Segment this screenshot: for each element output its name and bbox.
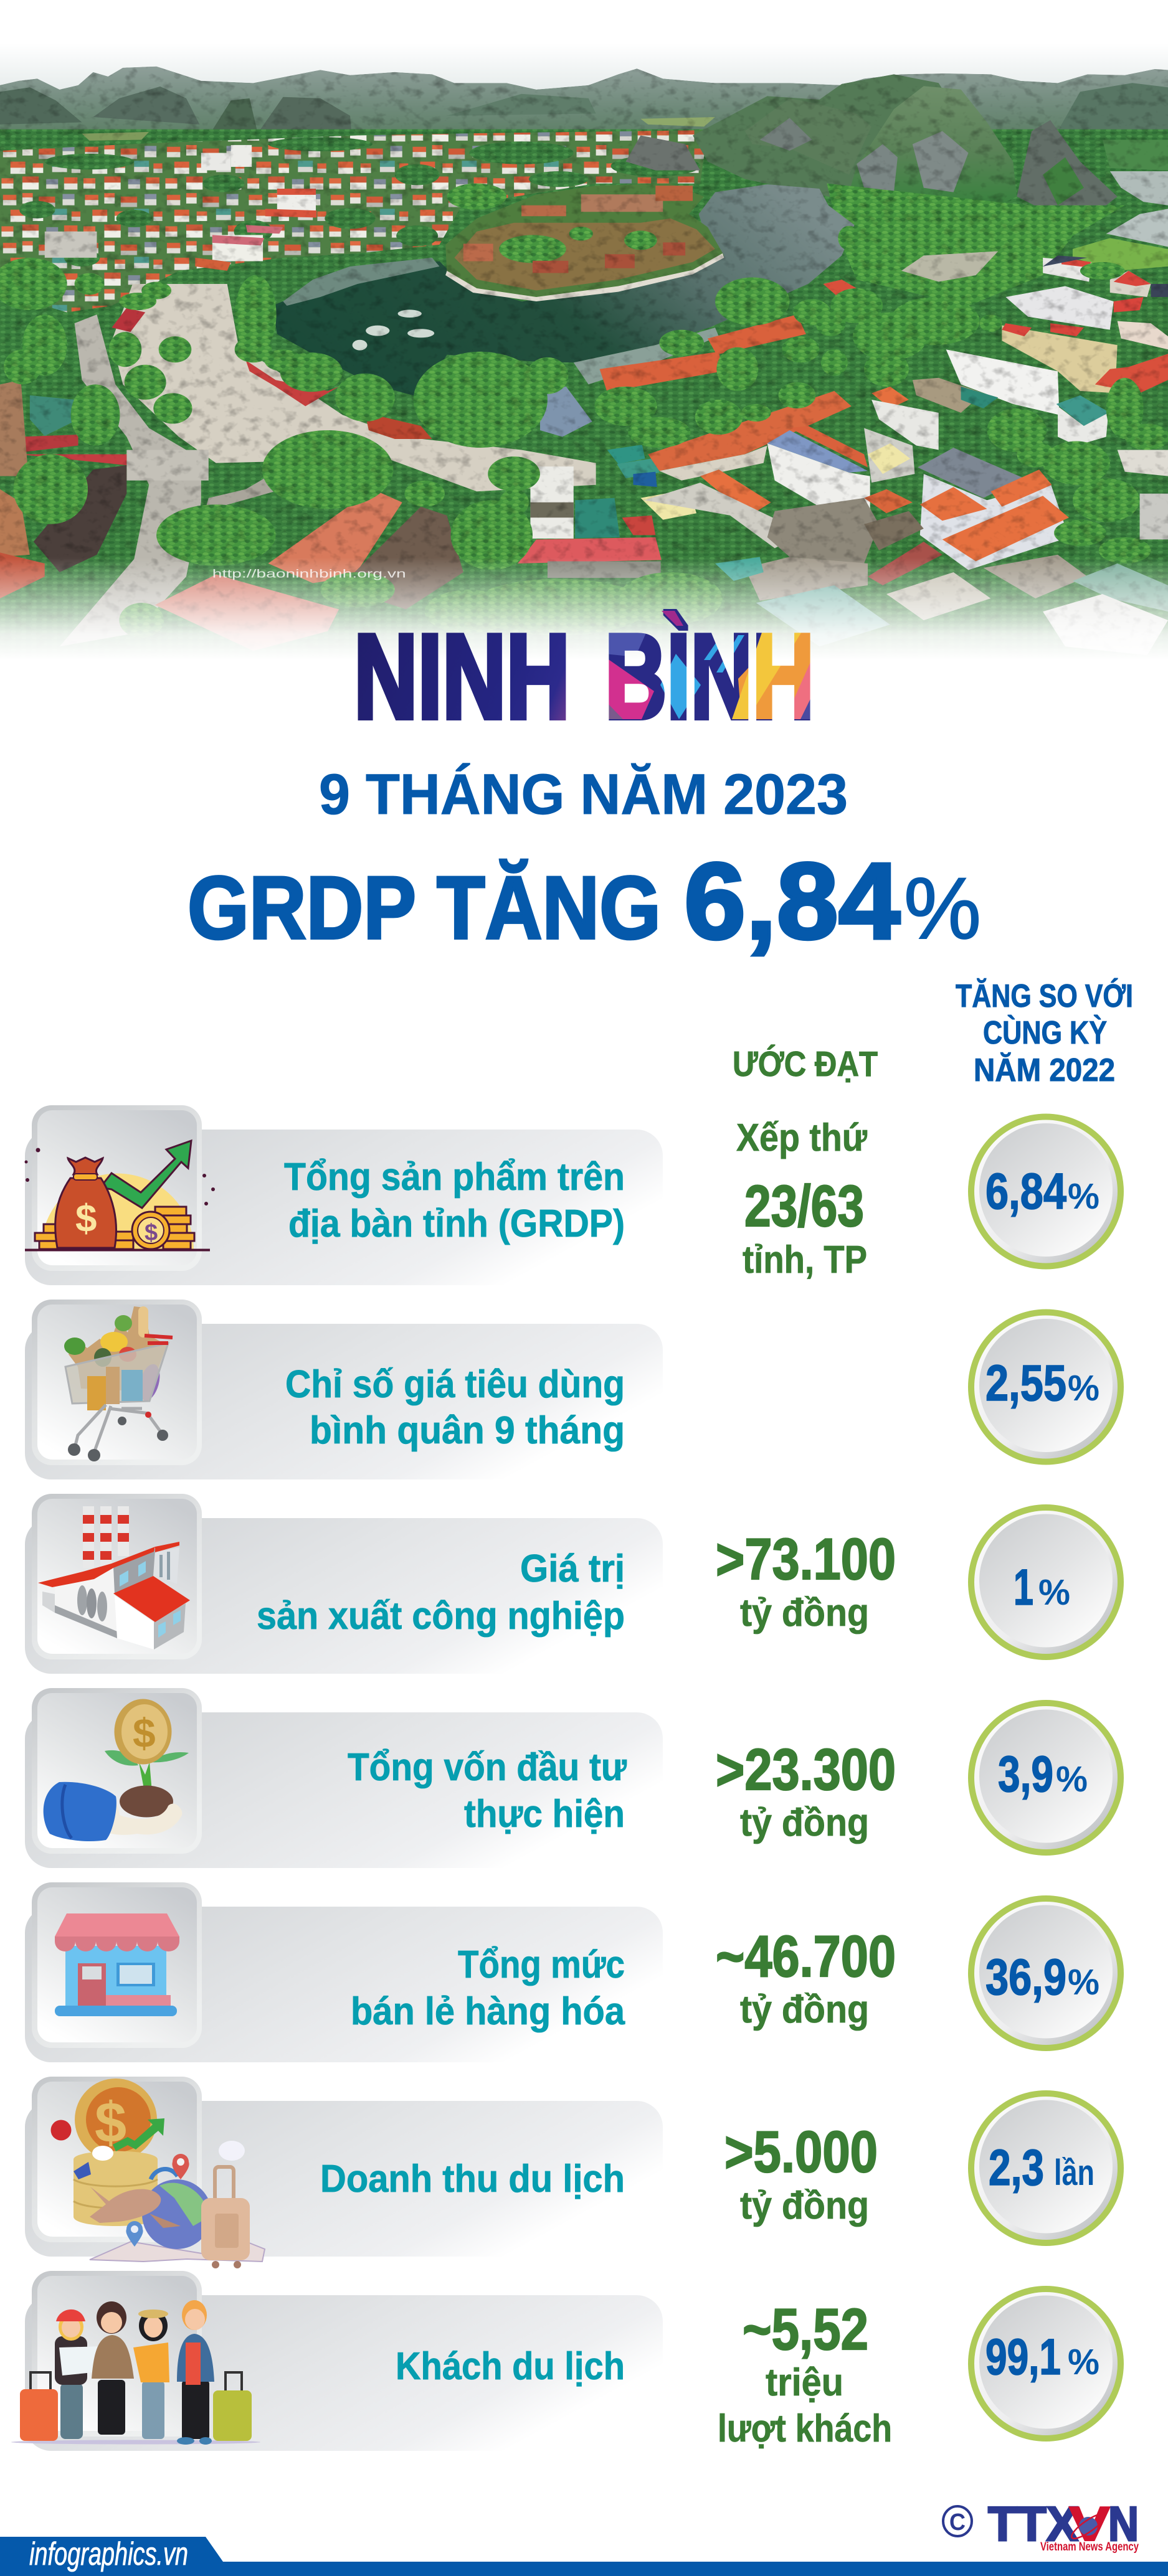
- value: xếp thứ 23/63 tỉnh, TP: [736, 1116, 867, 1281]
- label panel: Giá trị: [520, 1547, 625, 1590]
- value: >73.100 tỷ đồng: tỷ đồng: [740, 1592, 869, 1635]
- logo: TTXVN Vietnam News Agency: N: [1108, 2496, 1139, 2551]
- circle: 99,1%: 99,1: [985, 2329, 1061, 2385]
- title: NINH BÌNH: BÌNH: [605, 609, 814, 743]
- icon: group of tourists with suitcases: [11, 2271, 260, 2445]
- label panel: địa bàn tỉnh (GRDP): [288, 1202, 625, 1245]
- row 1: GRDP: [25, 1105, 1124, 1285]
- value: >5.000 tỷ đồng: tỷ đồng: [740, 2184, 869, 2227]
- icon: hand with coin plant: $: [133, 1710, 156, 1756]
- hero aerial photo of Ninh Bình: [0, 0, 1168, 697]
- label panel: Tổng mức: [458, 1943, 625, 1986]
- value: ~5,52 triệu lượt khách: ~5,52: [743, 2296, 868, 2362]
- icon: money bag with rising arrow: $: [75, 1197, 97, 1240]
- (hero town): [0, 130, 708, 313]
- row 3: industry: [25, 1494, 1124, 1674]
- value: ~46.700 tỷ đồng: [716, 1923, 896, 2031]
- logo: TTXVN Vietnam News Agency: V: [1069, 2496, 1110, 2551]
- row 5: retail: [25, 1882, 1124, 2062]
- column heading: tăng so với cùng kỳ năm 2022: TĂNG SO VỚI: [956, 978, 1133, 1014]
- label panel: [25, 1130, 663, 1285]
- circle: 2,55%: [968, 1309, 1124, 1465]
- value: ~5,52 triệu lượt khách: triệu: [766, 2361, 843, 2404]
- icon: coin, globe, plane and suitcase: [32, 2077, 265, 2268]
- (left plaza and road): [112, 284, 596, 491]
- (tree canopies): [0, 226, 1168, 638]
- label panel: [25, 1518, 663, 1674]
- circle: 6,84%: [968, 1113, 1124, 1269]
- circle: 2,55%: 2,55: [985, 1355, 1066, 1412]
- circle: 2,3 lần: [968, 2090, 1124, 2246]
- label panel: Khách du lịch: [396, 2345, 625, 2388]
- label panel: [25, 2101, 663, 2257]
- icon: hand with coin plant: [32, 1688, 202, 1854]
- circle: 2,3 lần: 2,3: [989, 2140, 1044, 2196]
- row 6: tourism revenue: [25, 2077, 1124, 2268]
- value: ~5,52 triệu lượt khách: [718, 2296, 892, 2450]
- (lower buildings): [268, 489, 402, 583]
- row 7: tourists: [11, 2271, 1124, 2451]
- value: >73.100 tỷ đồng: [716, 1526, 896, 1635]
- (island): [445, 184, 724, 300]
- label panel: [25, 1712, 663, 1868]
- circle: 99,1%: %: [1068, 2342, 1099, 2382]
- circle: 6,84%: 6,84: [985, 1163, 1066, 1220]
- label panel: Tổng sản phẩm trên: [284, 1156, 625, 1199]
- logo: TTXVN Vietnam News Agency: [943, 2496, 1139, 2554]
- label panel: Chỉ số giá tiêu dùng: [285, 1363, 625, 1406]
- column heading: tăng so với cùng kỳ năm 2022: [956, 978, 1133, 1088]
- (mountains right): [693, 74, 990, 201]
- icon: money bag with rising arrow: [25, 1105, 215, 1271]
- (lake): [273, 184, 855, 397]
- label panel: sản xuất công nghiệp: [257, 1595, 625, 1638]
- circle: 3,9%: 3,9: [998, 1746, 1053, 1803]
- icon: coin, globe, plane and suitcase: $: [95, 2091, 126, 2154]
- circle: 99,1%: [968, 2286, 1124, 2442]
- headline: GRDP tăng 6,84%: 6,84: [684, 840, 900, 961]
- headline: GRDP tăng 6,84%: GRDP TĂNG: [188, 859, 661, 958]
- label panel: Doanh thu du lịch: [320, 2158, 625, 2201]
- circle: 1%: [968, 1504, 1124, 1660]
- value: >5.000 tỷ đồng: [724, 2119, 878, 2227]
- label panel: bán lẻ hàng hóa: [351, 1990, 625, 2033]
- value: >23.300 tỷ đồng: >23.300: [716, 1737, 896, 1802]
- icon: money bag with rising arrow: $: [145, 1220, 158, 1246]
- label panel: Tổng vốn đầu tư: [348, 1746, 627, 1789]
- footer bar: [0, 2536, 1168, 2576]
- (white blocks in town): [45, 145, 316, 271]
- value: xếp thứ 23/63 tỉnh, TP: 23/63: [744, 1173, 864, 1238]
- row 2: CPI: [25, 1300, 1124, 1479]
- value: ~5,52 triệu lượt khách: lượt khách: [718, 2407, 892, 2450]
- value: >5.000 tỷ đồng: >5.000: [724, 2119, 878, 2184]
- headline: GRDP tăng 6,84%: %: [904, 859, 981, 957]
- column heading: ước đạt: ƯỚC ĐẠT: [733, 1044, 878, 1084]
- logo: TTXVN Vietnam News Agency: C: [949, 2509, 966, 2536]
- label panel: [25, 1324, 663, 1479]
- column heading: tăng so với cùng kỳ năm 2022: NĂM 2022: [974, 1052, 1115, 1088]
- label panel: bình quân 9 tháng: [310, 1409, 625, 1452]
- circle: 1%: 1: [1014, 1559, 1033, 1616]
- circle: 2,3 lần: lần: [1054, 2153, 1094, 2193]
- icon: factory: [32, 1494, 202, 1659]
- title: NINH BÌNH: NINH: [354, 609, 570, 743]
- logo: TTXVN Vietnam News Agency: TTX: [988, 2496, 1078, 2551]
- value: >23.300 tỷ đồng: tỷ đồng: [740, 1801, 869, 1844]
- circle: 2,55%: %: [1068, 1368, 1099, 1408]
- circle: 36,9%: %: [1068, 1962, 1099, 2003]
- circle: 3,9%: [968, 1700, 1124, 1856]
- label panel: [25, 2295, 663, 2451]
- circle: 1%: %: [1038, 1572, 1070, 1613]
- value: xếp thứ 23/63 tỉnh, TP: tỉnh, TP: [743, 1238, 867, 1281]
- (watermark): http://baoninhbinh.org.vn: [212, 568, 406, 580]
- footer bar: infographics.vn: [29, 2536, 188, 2572]
- icon: shopping cart: [32, 1300, 202, 1465]
- title: NINH BÌNH: [354, 609, 814, 743]
- value: >23.300 tỷ đồng: [716, 1737, 896, 1844]
- row 4: investment: [25, 1688, 1124, 1868]
- value: >73.100 tỷ đồng: >73.100: [716, 1526, 896, 1592]
- value: xếp thứ 23/63 tỉnh, TP: Xếp thứ: [736, 1116, 867, 1159]
- label panel: [25, 1907, 663, 2062]
- icon: store: [32, 1882, 202, 2048]
- circle: 36,9%: 36,9: [985, 1949, 1066, 2006]
- value: ~46.700 tỷ đồng: tỷ đồng: [740, 1988, 869, 2031]
- subtitle: 9 tháng năm 2023: 9 THÁNG NĂM 2023: [319, 763, 848, 826]
- logo: TTXVN Vietnam News Agency: Vietnam News Agency: [1040, 2541, 1139, 2554]
- headline: GRDP tăng 6,84%: [188, 840, 981, 961]
- circle: 6,84%: %: [1068, 1176, 1099, 1217]
- circle: 3,9%: %: [1056, 1759, 1088, 1800]
- value: ~46.700 tỷ đồng: ~46.700: [716, 1923, 896, 1989]
- column heading: tăng so với cùng kỳ năm 2022: CÙNG KỲ: [983, 1014, 1107, 1051]
- label panel: thực hiện: [464, 1793, 625, 1836]
- circle: 36,9%: [968, 1895, 1124, 2051]
